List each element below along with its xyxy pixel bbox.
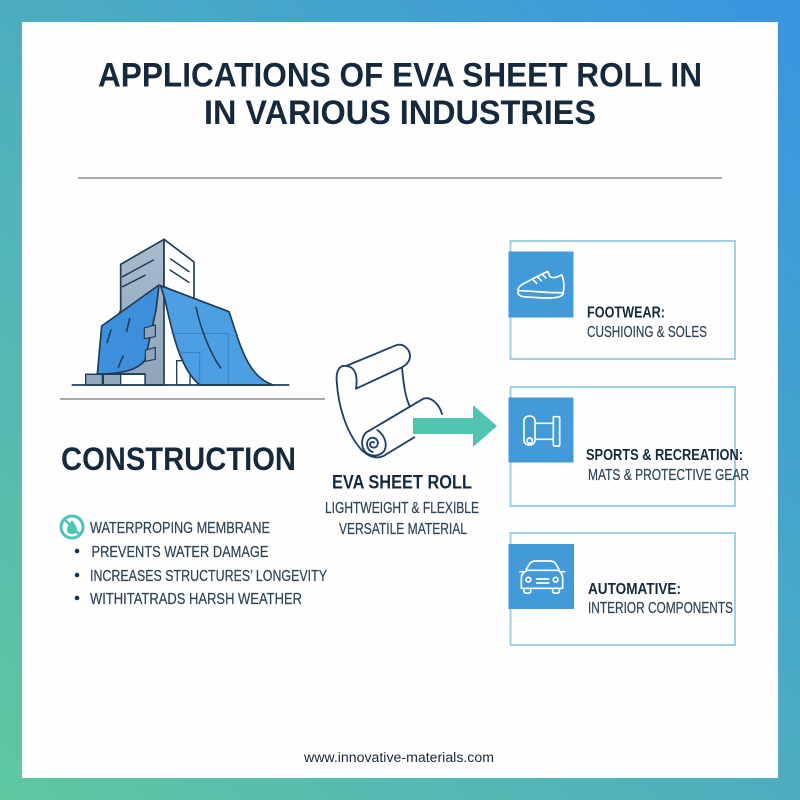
panel: sports and recreation — [508, 387, 749, 506]
construction benefits list — [61, 516, 327, 608]
title: IN VARIOUS INDUSTRIES — [204, 94, 596, 132]
panel: automotive: AUTOMATIVE: — [588, 581, 681, 598]
heading: construction: CONSTRUCTION — [61, 441, 296, 477]
icon: no water drop — [61, 516, 83, 538]
title: APPLICATIONS OF EVA SHEET ROLL IN — [98, 56, 702, 94]
panel: sports and recreation: SPORTS & RECREATION: — [586, 447, 743, 464]
panel: sports and recreation: MATS & PROTECTIVE GEAR — [588, 467, 749, 484]
icon: building draped with membrane — [72, 239, 289, 385]
construction benefits list: WITHITATRADS HARSH WEATHER — [90, 591, 302, 608]
title — [98, 56, 702, 132]
construction benefits list: WATERPROPING MEMBRANE — [90, 520, 270, 537]
footer url: www.innovative-materials.com — [303, 750, 494, 765]
panel: footwear — [508, 241, 735, 359]
construction benefits list: INCREASES STRUCTURES’ LONGEVITY — [90, 568, 327, 585]
EVA sheet roll caption — [325, 472, 479, 538]
panel: automotive — [508, 533, 735, 645]
EVA sheet roll caption: LIGHTWEIGHT & FLEXIBLE — [325, 500, 479, 517]
EVA sheet roll caption: EVA SHEET ROLL — [332, 472, 472, 494]
panel: automotive: INTERIOR COMPONENTS — [588, 600, 733, 617]
panel: footwear: FOOTWEAR: — [587, 304, 665, 322]
icon: rolled mat — [524, 416, 560, 446]
icon: shoe — [518, 271, 564, 298]
panel: footwear: CUSHIOING & SOLES — [587, 324, 707, 341]
construction benefits list: PREVENTS WATER DAMAGE — [92, 544, 268, 561]
arrow to applications — [413, 405, 497, 447]
icon: EVA sheet roll — [337, 345, 442, 457]
EVA sheet roll caption: VERSATILE MATERIAL — [339, 521, 467, 538]
icon: car — [520, 561, 565, 593]
